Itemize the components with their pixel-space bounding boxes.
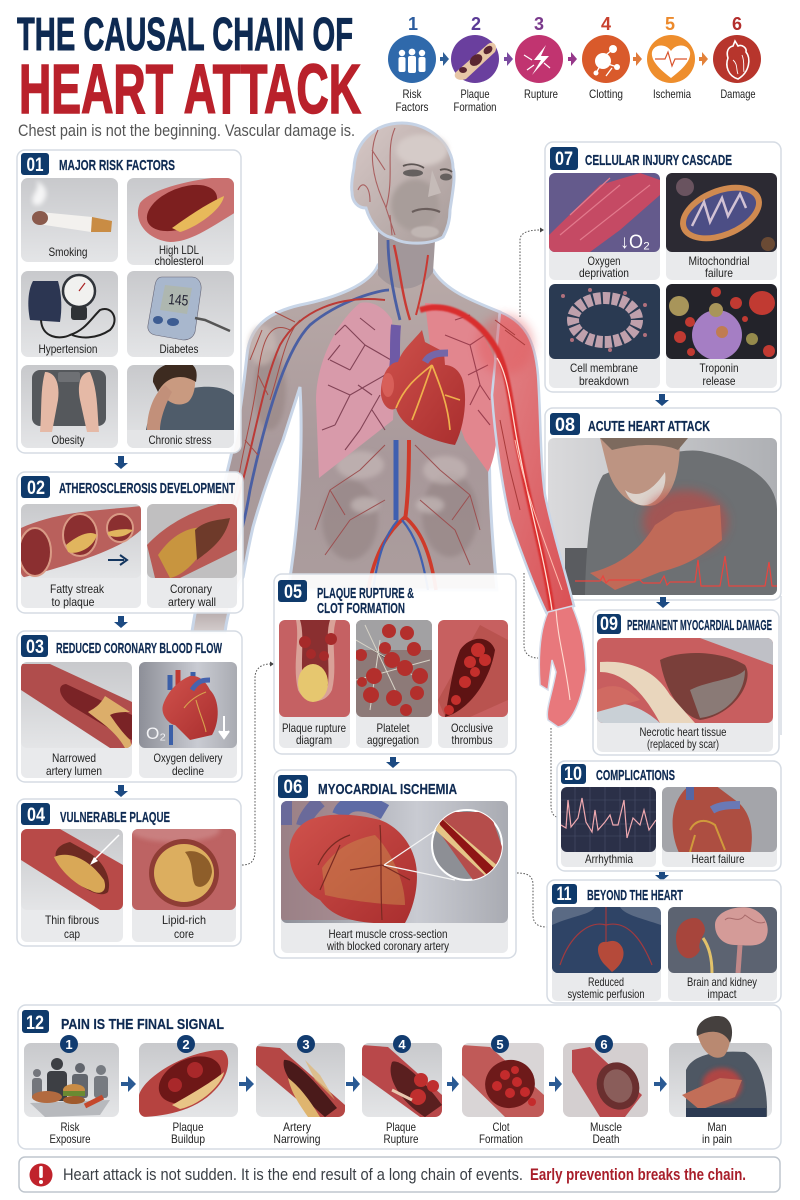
badge 08 — [550, 413, 580, 436]
step 6 damage: 6 — [732, 14, 742, 34]
captions 04: cap — [64, 927, 80, 941]
step 3 rupture — [515, 14, 563, 101]
tile: brain and kidney — [668, 907, 777, 973]
arrow: 01 to 02 — [114, 456, 128, 469]
numbered step markers: 3 — [302, 1037, 310, 1052]
captions 04: core — [174, 927, 194, 941]
captions 11: systemic perfusion — [568, 987, 644, 1001]
badge 05: 05 — [284, 582, 302, 603]
badge 10: 10 — [564, 764, 582, 785]
causal chain stepper — [388, 14, 761, 114]
tile: plaque rupture — [362, 1043, 442, 1117]
captions 11: Reduced — [588, 975, 624, 989]
captions 05: Plaque rupture — [282, 721, 346, 735]
sequence captions — [50, 1120, 732, 1146]
captions 11: impact — [708, 987, 737, 1001]
badge 01 — [21, 153, 49, 176]
captions 10: Heart failure — [692, 852, 745, 866]
connector arrowheads — [270, 228, 544, 666]
arrow: 02 to 03 — [114, 616, 128, 628]
step 5 ischemia: Ischemia — [653, 87, 691, 101]
heading 01: MAJOR RISK FACTORS — [59, 157, 175, 174]
panel: vulnerable plaque — [17, 799, 241, 946]
sequence captions: Death — [592, 1132, 620, 1146]
tile: thin fibrous cap — [21, 829, 123, 910]
step 1 risk factors — [388, 14, 436, 114]
captions 07: Cell membrane — [570, 361, 638, 375]
connector: figure to panel 07 — [520, 230, 540, 317]
captions 06 — [326, 927, 449, 953]
shoulder glow — [477, 315, 533, 375]
image: heart with blocked artery — [281, 801, 508, 923]
badge 12: 12 — [26, 1013, 44, 1034]
heading 04: VULNERABLE PLAQUE — [60, 809, 170, 826]
heading 10: COMPLICATIONS — [596, 767, 675, 784]
step 5 ischemia — [647, 14, 695, 101]
icon: warning — [30, 1164, 52, 1186]
image: man clutching chest — [548, 438, 777, 595]
caption backgrounds 04 — [21, 900, 236, 942]
step 3 rupture: Rupture — [524, 87, 558, 101]
panel: plaque rupture and clot formation — [274, 574, 516, 754]
tile: heart failure — [662, 785, 777, 855]
tile: lipid-rich core — [132, 829, 236, 910]
tile: oxygen deprivation — [549, 173, 660, 253]
captions 03: Narrowed — [52, 751, 96, 765]
tile: plaque rupture — [279, 620, 350, 717]
tile: chronic stress: Chronic stress — [148, 433, 212, 447]
step 3 rupture: 3 — [534, 14, 544, 34]
panel: acute heart attack — [545, 408, 781, 735]
arrow: 10 to 11 — [655, 872, 669, 881]
captions 04: Lipid-rich — [162, 913, 206, 927]
head — [352, 123, 454, 243]
captions 05: Platelet — [376, 721, 410, 735]
captions 05 — [282, 721, 493, 747]
caption backgrounds 11 — [552, 966, 777, 1001]
sequence captions: Artery — [283, 1120, 311, 1134]
tile: artery narrowing — [256, 1043, 345, 1117]
heading 11: BEYOND THE HEART — [587, 887, 683, 904]
step 2 plaque formation: Formation — [454, 100, 496, 114]
step 4 clotting: 4 — [601, 14, 611, 34]
badge 03: 03 — [26, 637, 44, 658]
step 2 plaque formation: Plaque — [460, 87, 490, 101]
tile: arrhythmia — [561, 787, 656, 852]
caption backgrounds 02 — [21, 560, 237, 608]
arrow: 07 to 08 — [655, 394, 669, 406]
captions 03: Oxygen delivery — [154, 751, 222, 765]
captions 05: aggregation — [367, 733, 419, 747]
badge 01: 01 — [26, 155, 44, 176]
captions 07: Troponin — [700, 361, 738, 375]
tile: cell membrane breakdown — [549, 284, 660, 359]
numbered step markers: 4 — [398, 1037, 406, 1052]
connector: panel 04 to 05 — [242, 664, 270, 865]
body vessels — [212, 240, 480, 600]
abdomen shading — [248, 325, 478, 560]
captions 05: thrombus — [452, 733, 492, 747]
tile: reduced systemic perfusion — [552, 907, 661, 973]
tile: smoking: Smoking — [48, 245, 88, 259]
captions 09: (replaced by scar) — [647, 737, 719, 751]
captions 03: artery lumen — [46, 764, 102, 778]
arm vessels — [420, 307, 562, 610]
numbered step markers: 2 — [182, 1037, 190, 1052]
captions 02 — [50, 582, 216, 609]
badge 08: 08 — [555, 415, 575, 436]
message text: Heart attack is not sudden. It is the end result of a long chain of events. — [63, 1165, 523, 1184]
tile: diabetes: 145 — [168, 291, 189, 310]
sequence captions: Formation — [479, 1132, 523, 1146]
step 5 ischemia: 5 — [665, 14, 675, 34]
panel: complications — [557, 761, 781, 871]
panel: myocardial ischemia — [274, 770, 516, 958]
captions 06: Heart muscle cross-section — [328, 927, 448, 941]
heading 07: CELLULAR INJURY CASCADE — [585, 152, 732, 169]
sequence captions: Muscle — [590, 1120, 622, 1134]
tile: high LDL cholesterol: High LDL — [159, 243, 199, 257]
captions 07: failure — [705, 266, 733, 280]
step 2 plaque formation: 2 — [471, 14, 481, 34]
tile: high LDL cholesterol: cholesterol — [154, 254, 204, 268]
captions 07: Oxygen — [588, 254, 620, 268]
captions 07: Mitochondrial — [688, 254, 750, 268]
panel: pain is the final signal — [18, 1005, 781, 1149]
heading 12: PAIN IS THE FINAL SIGNAL — [61, 1016, 224, 1033]
connector: panel 06 to 11 — [517, 873, 547, 927]
heading 05 — [317, 585, 414, 617]
tile: diabetes: Diabetes — [160, 342, 198, 356]
numbered step markers: 6 — [600, 1037, 608, 1052]
step 6 damage — [713, 14, 761, 101]
heading 02: ATHEROSCLEROSIS DEVELOPMENT — [59, 480, 235, 497]
heading 06: MYOCARDIAL ISCHEMIA — [318, 781, 457, 798]
step 1 risk factors: Risk — [402, 87, 422, 101]
tile: fatty streak — [19, 504, 141, 578]
tile: chronic stress — [127, 362, 234, 448]
step 1 risk factors: Factors — [396, 100, 428, 114]
hand — [539, 606, 586, 727]
badge 06 — [278, 775, 308, 798]
badge 11: 11 — [556, 884, 572, 905]
captions 02: Coronary — [170, 582, 212, 596]
tile: obesity: Obesity — [52, 433, 84, 447]
captions 05: diagram — [296, 733, 332, 747]
captions 02: artery wall — [168, 595, 216, 609]
image: necrotic heart tissue — [597, 638, 773, 723]
title — [17, 8, 361, 128]
captions 07: release — [702, 374, 736, 388]
tile: clot formation — [462, 1043, 544, 1117]
captions 10 — [585, 852, 745, 866]
tile: coronary artery wall — [147, 500, 237, 578]
tile: diabetes — [127, 271, 234, 357]
badge 04: 04 — [27, 805, 45, 826]
panel: atherosclerosis development — [17, 472, 243, 613]
captions 03: decline — [172, 764, 204, 778]
numbered step markers: 5 — [496, 1037, 504, 1052]
badge 07 — [550, 147, 578, 170]
tile: oxygen deprivation: ↓O₂ — [620, 232, 650, 253]
arrow: 05 to 06 — [386, 757, 400, 768]
tile: obesity — [21, 365, 118, 448]
captions 07 — [570, 254, 750, 388]
heading 05: PLAQUE RUPTURE & — [317, 585, 414, 602]
step arrows — [440, 52, 708, 66]
tile: hypertension — [21, 271, 118, 357]
inset: blocked artery magnified — [431, 809, 503, 881]
panel: reduced coronary blood flow — [17, 631, 242, 782]
sequence captions: Clot — [492, 1120, 510, 1134]
tile: risk exposure — [24, 1043, 119, 1117]
captions 05: Occlusive — [451, 721, 493, 735]
captions 09 — [640, 725, 727, 751]
caption background 09 — [597, 715, 773, 752]
heading 05: CLOT FORMATION — [317, 600, 405, 617]
face features — [358, 128, 452, 238]
caption backgrounds 10 — [561, 845, 777, 867]
captions 06: with blocked coronary artery — [326, 939, 449, 953]
badge 02 — [21, 476, 50, 499]
panel: beyond the heart — [547, 880, 781, 1003]
badge 02: 02 — [27, 478, 45, 499]
panel: cellular injury cascade — [545, 142, 781, 392]
tile: oxygen delivery decline: O₂ — [146, 724, 166, 743]
sequence captions: Rupture — [384, 1132, 419, 1146]
badge 07: 07 — [555, 149, 573, 170]
badge 09: 09 — [600, 614, 618, 635]
sequence captions: Narrowing — [274, 1132, 320, 1146]
numbered step markers — [60, 1035, 613, 1053]
captions 02: Fatty streak — [50, 582, 105, 596]
captions 09: Necrotic heart tissue — [640, 725, 727, 739]
tile: man in pain — [669, 1043, 772, 1117]
badge 06: 06 — [284, 777, 302, 798]
title: THE CAUSAL CHAIN OF — [17, 8, 353, 60]
badge 05 — [278, 580, 307, 603]
irradiating right arm — [492, 312, 574, 616]
captions 10: Arrhythmia — [585, 852, 633, 866]
heading 08: ACUTE HEART ATTACK — [588, 418, 710, 435]
sequence captions: Exposure — [50, 1132, 91, 1146]
captions 03 — [46, 751, 222, 778]
panel: permanent myocardial damage — [593, 610, 779, 755]
caption backgrounds 07 — [549, 240, 777, 388]
numbered step markers: 1 — [65, 1037, 73, 1052]
callout: final message — [19, 1157, 780, 1192]
connector: figure to hand — [524, 573, 538, 658]
arrow: 08 to 09 — [656, 597, 670, 608]
captions 04: Thin fibrous — [45, 913, 99, 927]
sequence captions: Man — [708, 1120, 726, 1134]
sequence arrows — [121, 1076, 667, 1092]
tile: troponin release — [666, 284, 777, 360]
neck — [378, 225, 436, 289]
badge 04 — [21, 803, 50, 826]
step 4 clotting: Clotting — [589, 87, 623, 101]
anatomical human figure — [192, 123, 586, 727]
connector: figure hand to panel 10 — [551, 728, 557, 817]
arrow: 03 to 04 — [114, 785, 128, 797]
caption background 06 — [281, 915, 508, 953]
tile: muscle death — [563, 1043, 648, 1117]
captions 11 — [568, 975, 757, 1001]
caption backgrounds 03 — [21, 735, 237, 778]
lungs — [316, 302, 499, 478]
sequence captions: in pain — [702, 1132, 732, 1146]
sequence captions: Plaque — [172, 1120, 204, 1134]
title: HEART ATTACK — [19, 50, 361, 128]
tile: smoking — [21, 178, 118, 262]
tile: occlusive thrombus — [438, 620, 508, 717]
tile: plaque buildup — [139, 1043, 238, 1117]
tile: hypertension: Hypertension — [38, 342, 98, 356]
captions 11: Brain and kidney — [687, 975, 757, 989]
captions 07: deprivation — [579, 266, 629, 280]
sequence captions: Buildup — [171, 1132, 205, 1146]
tile: platelet aggregation — [355, 620, 432, 717]
tile: oxygen delivery decline — [139, 662, 237, 748]
tile: narrowed artery lumen — [21, 662, 132, 748]
subtitle: Chest pain is not the beginning. Vascular damage is. — [18, 121, 355, 140]
heading 03: REDUCED CORONARY BLOOD FLOW — [56, 640, 223, 657]
step 6 damage: Damage — [720, 87, 756, 101]
tile: mitochondrial failure — [666, 173, 777, 252]
step 4 clotting — [582, 14, 630, 101]
tile: high LDL cholesterol — [127, 176, 236, 268]
captions 07: breakdown — [579, 374, 629, 388]
left arm and torso — [192, 265, 500, 632]
sequence captions: Plaque — [386, 1120, 416, 1134]
captions 02: to plaque — [52, 595, 95, 609]
captions 04 — [45, 913, 206, 941]
badge 12 — [22, 1010, 49, 1034]
caption backgrounds 05 — [279, 705, 508, 748]
head overflowing tile — [697, 1016, 732, 1058]
step 2 plaque formation — [451, 14, 499, 114]
step 1 risk factors: 1 — [408, 14, 418, 34]
heart — [381, 325, 465, 445]
panel: major risk factors — [17, 150, 241, 453]
emphasis text: Early prevention breaks the chain. — [530, 1165, 746, 1184]
sequence captions: Risk — [60, 1120, 80, 1134]
